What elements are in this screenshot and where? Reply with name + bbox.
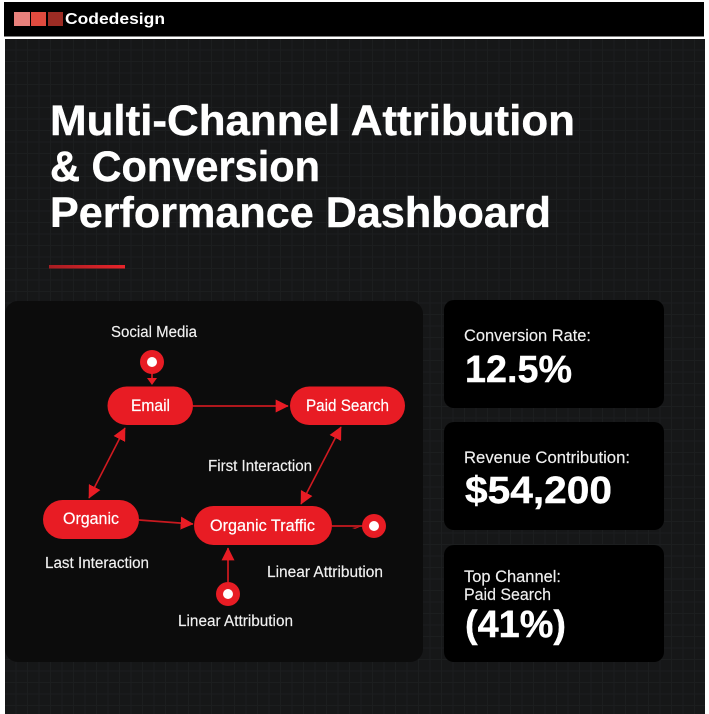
icon: bottom node	[216, 582, 240, 606]
node: organic traffic: Organic Traffic	[210, 517, 315, 535]
node: paid search: Paid Search	[306, 397, 389, 415]
header bar	[4, 2, 704, 36]
panel: attribution flow diagram	[5, 301, 423, 662]
logo squares	[14, 12, 63, 26]
arrow: paid search and organic traffic	[301, 427, 341, 504]
logo wordmark: Codedesign	[65, 11, 165, 28]
label: last interaction: Last Interaction	[45, 555, 149, 572]
icon: social media node	[140, 350, 164, 374]
title	[50, 97, 575, 237]
panel: revenue contribution: Revenue Contribution:	[464, 448, 630, 467]
icon: right node	[362, 514, 386, 538]
node: organic	[43, 500, 139, 539]
panel: top channel	[444, 545, 664, 662]
panel: revenue contribution: $54,200	[465, 470, 612, 512]
node: email: Email	[131, 397, 170, 415]
panel: conversion rate: 12.5%	[465, 349, 572, 391]
panel: conversion rate	[444, 300, 664, 408]
panel: revenue contribution	[444, 422, 664, 530]
title: & Conversion	[50, 143, 320, 191]
node: organic traffic	[194, 506, 332, 545]
title accent rule	[49, 265, 125, 268]
panel: top channel: Paid Search	[464, 585, 551, 604]
label: first interaction: First Interaction	[208, 458, 312, 475]
label: social media: Social Media	[111, 324, 197, 341]
node: email	[108, 386, 193, 425]
label: linear attribution bottom: Linear Attribution	[178, 613, 293, 630]
node: paid search	[290, 386, 405, 425]
panel: top channel: Top Channel:	[464, 567, 561, 586]
arrow: email and organic	[89, 428, 125, 498]
panel: conversion rate: Conversion Rate:	[464, 326, 591, 345]
title: Multi-Channel Attribution	[50, 97, 575, 145]
title: Performance Dashboard	[50, 189, 551, 237]
label: linear attribution right: Linear Attribution	[267, 564, 383, 581]
arrow: email to paid search	[193, 405, 288, 407]
arrow: organic to organic traffic	[139, 520, 193, 524]
panel: top channel: (41%)	[465, 604, 566, 646]
arrow: bottom node to organic traffic	[227, 548, 229, 582]
node: organic: Organic	[63, 510, 119, 528]
arrow: social media to email	[147, 373, 157, 385]
arrow: organic traffic to node	[332, 526, 362, 529]
